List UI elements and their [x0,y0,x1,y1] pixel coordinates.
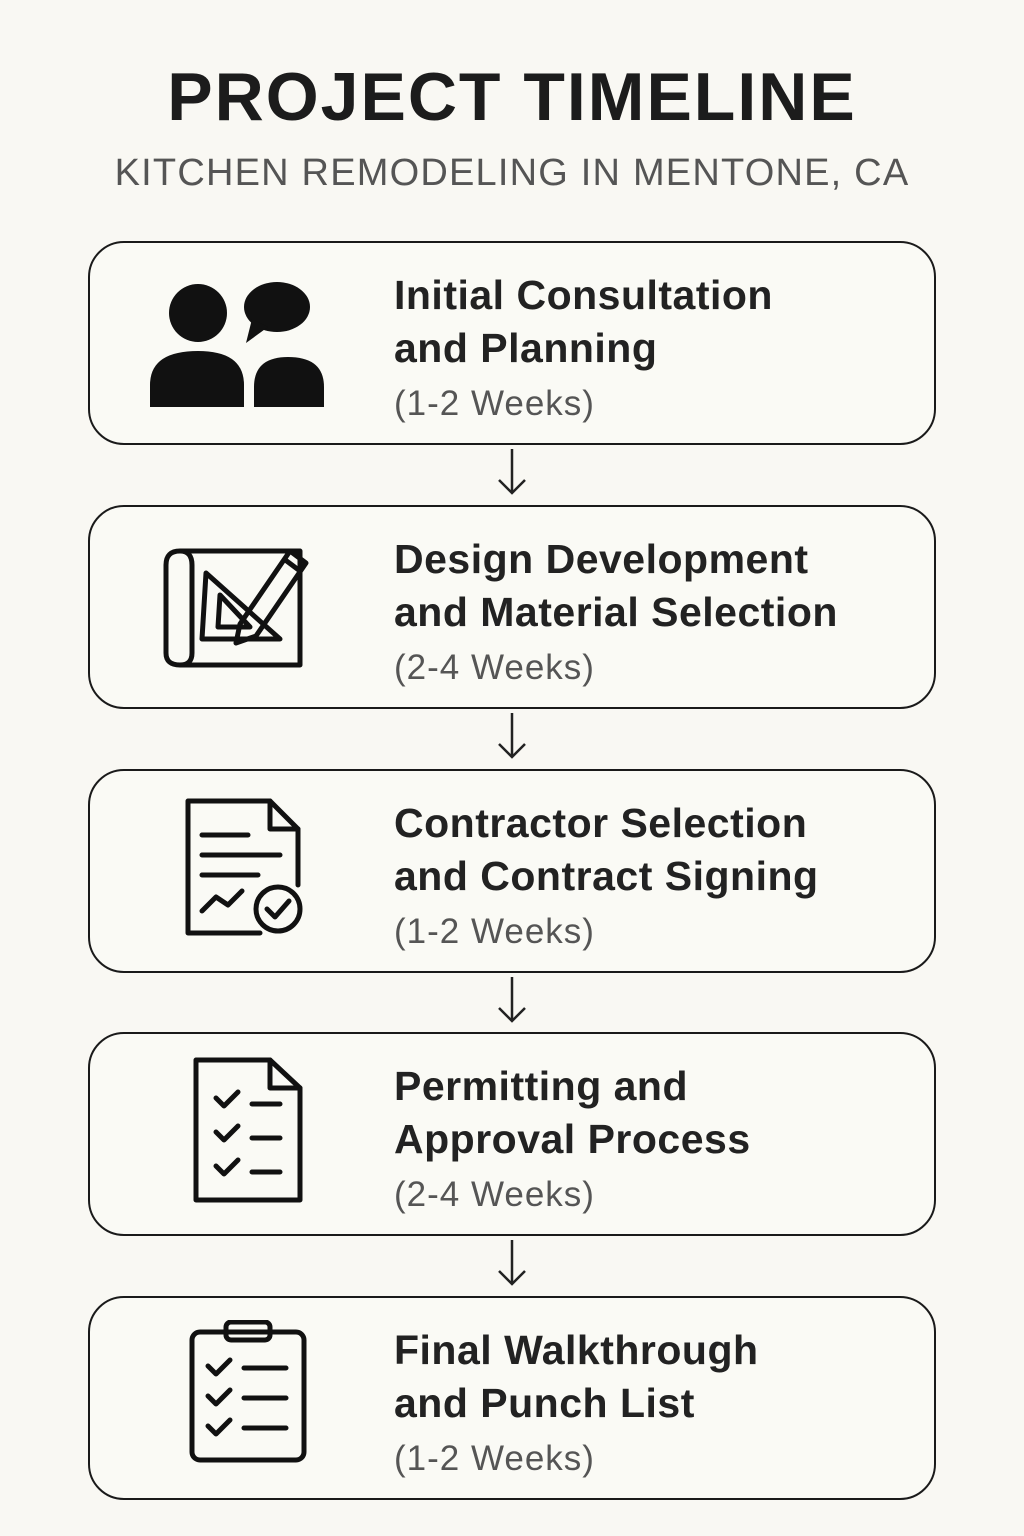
text: step 4 [394,1063,751,1214]
panel: step 2 [88,505,936,709]
text: step 2: and Material Selection [394,589,838,635]
icon: blueprint and pencil [164,548,308,668]
panel: step 4 [88,1032,936,1236]
text: step 3: Contractor Selection [394,800,807,846]
icon: checklist document [194,1058,302,1202]
panel: step 5 [88,1296,936,1500]
text: step 4: Approval Process [394,1116,751,1162]
text: step 3: and Contract Signing [394,853,819,899]
text: step 1: and Planning [394,325,657,371]
text: step 1: (1-2 Weeks) [394,384,595,423]
arrow 4 [498,1240,526,1286]
subtitle: KITCHEN REMODELING IN MENTONE, CA [115,152,909,194]
arrow 1 [498,449,526,495]
text: step 4: (2-4 Weeks) [394,1175,595,1214]
text: step 1: Initial Consultation [394,272,773,318]
text: step 5: (1-2 Weeks) [394,1439,595,1478]
icon: clipboard [190,1320,306,1462]
text: step 1 [394,272,773,423]
text: step 2: (2-4 Weeks) [394,648,595,687]
arrow 3 [498,977,526,1023]
arrow 2 [498,713,526,759]
panel: step 3 [88,769,936,973]
text: step 3: (1-2 Weeks) [394,912,595,951]
text: step 3 [394,800,819,951]
text: step 2 [394,536,838,687]
text: step 2: Design Development [394,536,809,582]
text: step 5: and Punch List [394,1380,695,1426]
text: step 5: Final Walkthrough [394,1327,759,1373]
title: PROJECT TIMELINE [167,59,857,135]
text: step 5 [394,1327,759,1478]
panel: step 1 [88,241,936,445]
icon: contract with check [186,798,302,936]
text: step 4: Permitting and [394,1063,688,1109]
icon: people talking [150,282,324,407]
